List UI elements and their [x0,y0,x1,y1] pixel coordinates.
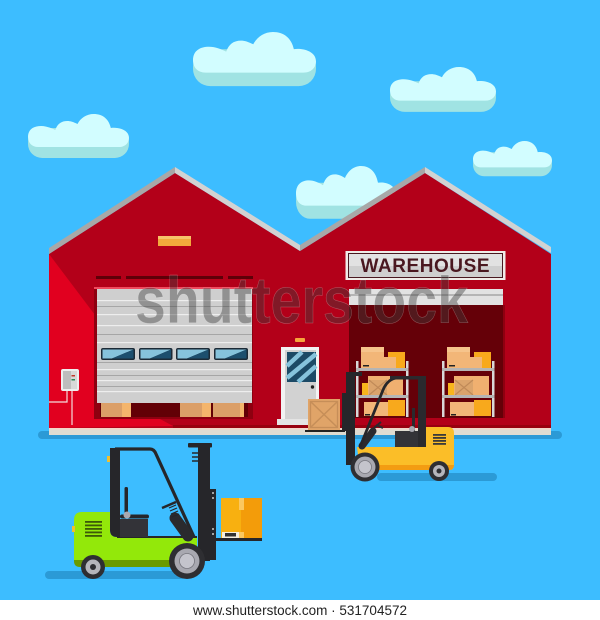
cloud: behind roof [296,166,396,219]
front wheel [169,543,205,579]
cloud: far right [473,141,552,176]
floor shadow line [173,425,551,428]
seat [395,431,419,447]
grille [85,521,102,537]
shadow: yellow forklift [377,473,497,481]
watermark: shutterstock [135,263,468,337]
dark lintel marks [96,276,253,279]
crate on pallet [305,399,345,432]
floor strip [49,428,551,435]
cab frame [115,449,194,537]
boxes under door [101,403,122,417]
wall light wedge [49,254,173,428]
steering column [175,518,188,536]
body [357,427,454,470]
cab frame [360,378,422,447]
cargo box [221,498,262,538]
electric box with wires [49,369,79,425]
roof left slope shades [49,167,175,254]
footer credit: www.shutterstock.com · 531704572 [192,603,407,618]
rear wheel [81,555,105,579]
mast [346,372,355,465]
carriage [210,489,216,560]
shelf right [442,347,494,417]
rear wheel [429,461,449,481]
roller door panels [97,289,252,403]
cloud: top centre [193,32,316,86]
body [74,512,197,560]
ground shadow strip [38,431,562,439]
small door [277,338,320,425]
steering column [362,431,373,446]
front wheel [350,452,380,482]
shelf left [356,347,408,417]
wall [49,173,551,428]
door windows [101,348,248,360]
mast [198,443,210,561]
warehouse building [49,167,551,435]
warehouse sign [346,251,506,280]
cloud: top right [390,67,496,112]
yellow forklift [342,372,454,482]
roller door bay [94,287,253,419]
open storage bay [349,289,505,418]
footer band [0,600,600,620]
fork [210,538,262,541]
seat [120,519,148,537]
warehouse sign: WAREHOUSE [360,256,490,277]
shutter [349,289,503,305]
shadow: green forklift [45,571,185,579]
cloud: left [28,114,129,158]
green forklift [72,443,262,579]
attic vent light [158,236,191,246]
grille [433,434,446,445]
